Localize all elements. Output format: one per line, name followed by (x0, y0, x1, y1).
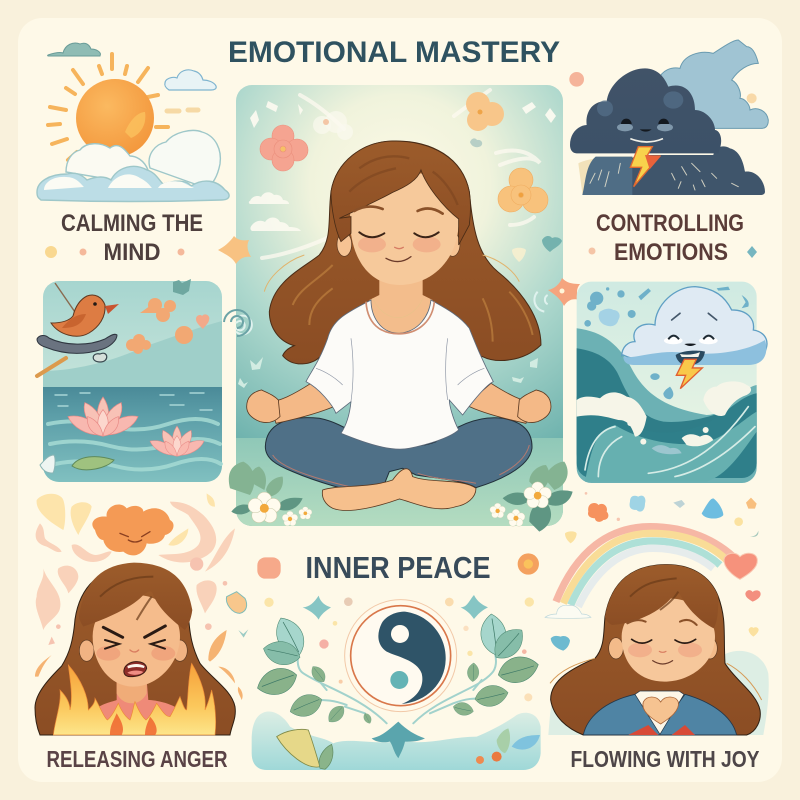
icon: storm clouds (569, 40, 768, 195)
icon: yin yang with vines (252, 553, 541, 770)
hair back (269, 141, 541, 364)
angry orange cloud (92, 505, 174, 555)
swirls (236, 292, 548, 334)
hair (35, 566, 235, 735)
neck heart (643, 697, 679, 724)
teal heart (542, 236, 562, 252)
decorative dots around emotions label (588, 246, 757, 258)
foliage left with flowers (229, 462, 312, 526)
sad cloud (622, 287, 767, 358)
text: inner peace heading: INNER PEACE (306, 550, 490, 585)
icon: lily pad and white flower (40, 455, 114, 473)
confetti (565, 492, 758, 543)
text: calming the mind: CALMING THE (61, 210, 203, 237)
foam (577, 381, 751, 454)
storm cloud face (617, 119, 673, 142)
fringe (79, 563, 192, 630)
lightning bolt (630, 147, 660, 187)
bottom teal band (252, 711, 541, 770)
icon: bird on branch (37, 283, 119, 376)
yin yang symbol (378, 612, 446, 704)
rainbow (556, 527, 737, 607)
neck (369, 280, 433, 335)
confetti dots (257, 553, 539, 701)
ears (79, 640, 187, 661)
panel: central meditating figure (218, 85, 580, 532)
legs (265, 418, 532, 497)
feet (322, 469, 476, 510)
teal star accents (303, 595, 488, 758)
panel: wave and cloud (577, 282, 767, 483)
fringe (605, 565, 718, 628)
face (622, 598, 715, 682)
panel: girl flowing with joy (545, 492, 769, 735)
orange flower right (498, 168, 548, 213)
ears (609, 638, 717, 659)
small cloud under rainbow (545, 605, 591, 618)
cloud face (120, 532, 150, 542)
big wave (577, 328, 757, 483)
blue flower (551, 636, 570, 651)
open mouth (124, 662, 147, 677)
pink flower (260, 125, 308, 171)
flames (53, 663, 216, 735)
decorative dots around mind label (45, 246, 184, 258)
face (350, 172, 459, 285)
orange flower top right (466, 92, 504, 131)
text: calming the mind (61, 210, 203, 266)
heart on rainbow (724, 553, 757, 579)
cheeks (358, 236, 441, 252)
fringe (331, 141, 471, 245)
panel: lake with bird and lotus (37, 279, 222, 482)
ring (345, 600, 457, 712)
face (93, 595, 180, 687)
foliage right with flowers (490, 462, 573, 532)
collar (635, 691, 684, 734)
arms (269, 383, 533, 423)
neck and pink top (93, 680, 187, 735)
eyes and brows (354, 207, 443, 237)
leaves right (452, 613, 539, 720)
background teal arc (548, 651, 769, 735)
text: releasing anger: RELEASING ANGER (46, 746, 228, 772)
hands (247, 390, 551, 423)
text: flowing with joy: FLOWING WITH JOY (570, 746, 760, 772)
panel: releasing anger (35, 493, 248, 735)
cheeks (96, 646, 175, 661)
nose and mouth (395, 247, 403, 249)
icon: small blue cloud near title (165, 70, 216, 90)
icon: lotus small (150, 426, 204, 456)
title: EMOTIONAL MASTERY (228, 36, 560, 69)
lightning (676, 359, 702, 389)
ears (337, 232, 460, 256)
text: controlling emotions: CONTROLLING (596, 210, 744, 237)
figure body (236, 141, 551, 510)
text: calming the mind: MIND (104, 239, 160, 266)
yellow leaf on band (277, 728, 540, 769)
cheeks (628, 643, 702, 657)
leaves left (257, 615, 372, 725)
small orange star flowers at panel edges (218, 236, 580, 336)
icon: floating flowers and leaves (126, 279, 209, 354)
shirt (306, 300, 493, 449)
icon: lotus large (68, 397, 138, 436)
text: controlling emotions: EMOTIONS (614, 239, 728, 266)
angry eyes and brows (103, 626, 165, 652)
light rays and clouds (262, 90, 540, 258)
swirls (36, 502, 235, 630)
icon: small teal cloud top left (48, 43, 100, 56)
eyes brows mouth (627, 620, 697, 664)
text: controlling emotions (596, 210, 744, 266)
clouds under sun (37, 130, 229, 202)
vines (298, 653, 496, 723)
floating bubbles (584, 287, 749, 399)
blue top (583, 694, 737, 735)
hair (551, 565, 760, 735)
icon: sun behind clouds (37, 54, 229, 202)
